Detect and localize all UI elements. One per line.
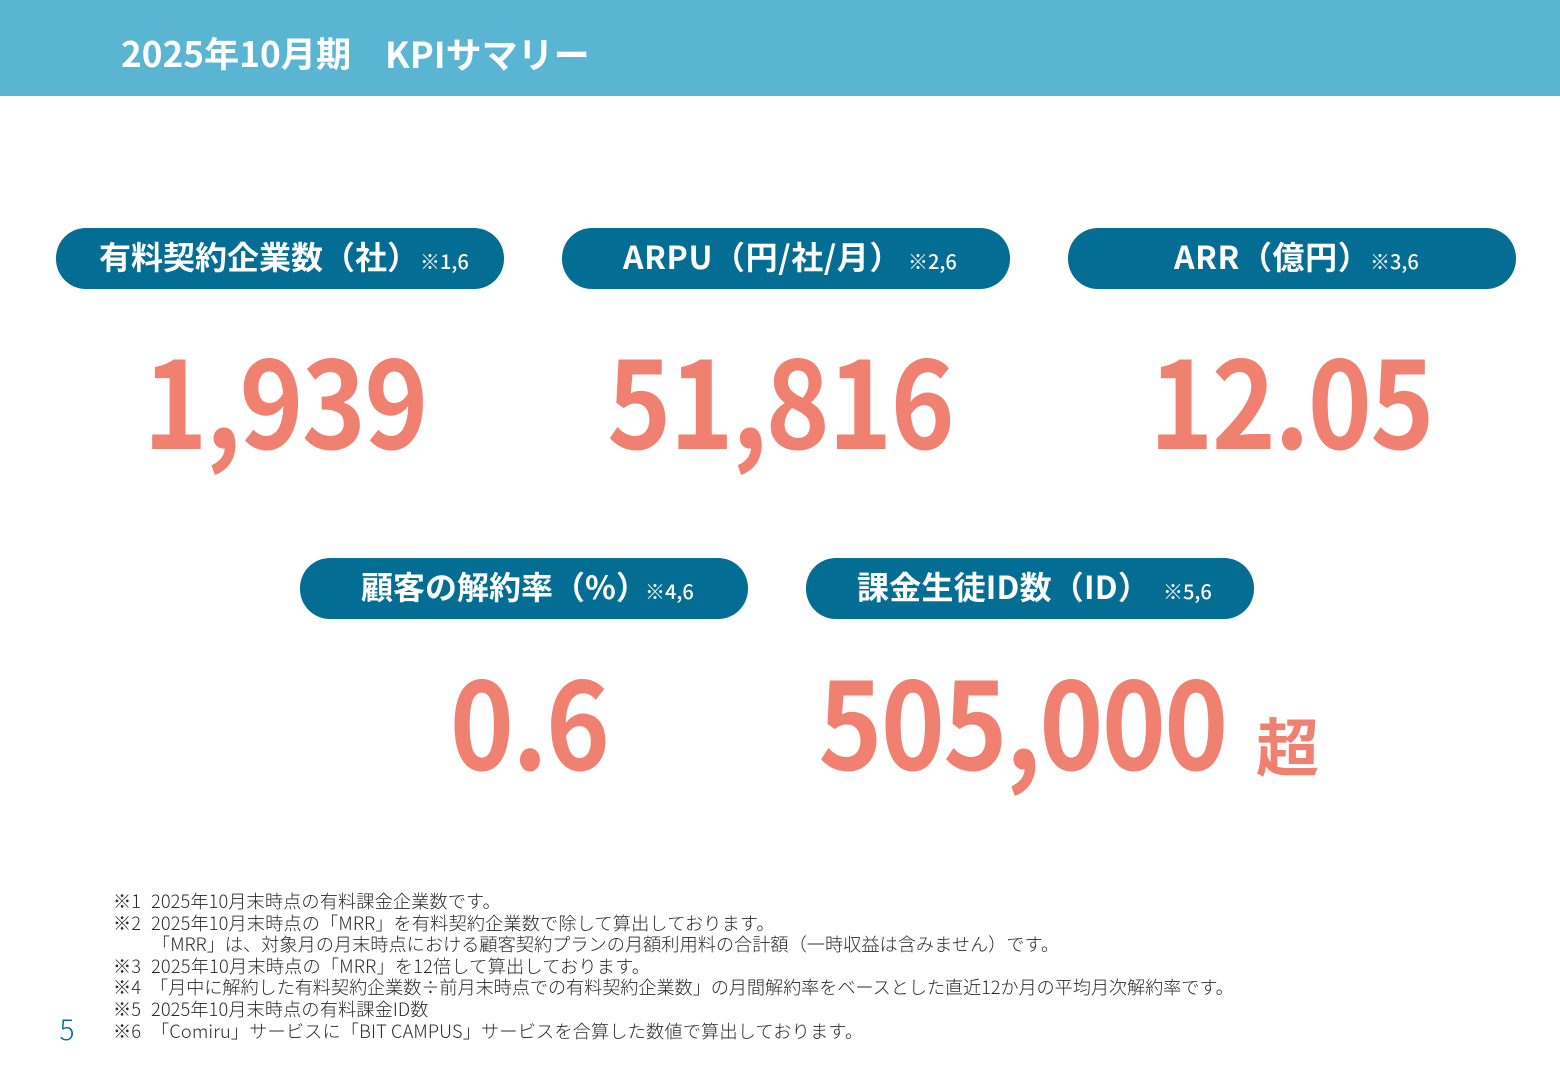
pill label: churn rate: ※4,6 <box>645 576 694 605</box>
pill label: ARR <box>1068 228 1516 289</box>
footnotes: 2025年10月末時点の「MRR」を有料契約企業数で除して算出しております。 <box>151 910 775 936</box>
footnotes: ※3 <box>113 952 141 978</box>
pill label: paying companies: 有料契約企業数（社） <box>99 233 419 279</box>
unit suffix: 超 <box>1256 699 1319 790</box>
footnotes: 「月中に解約した有料契約企業数÷前月末時点での有料契約企業数」の月間解約率をベースとした直近12か月の平均月次解約率です。 <box>150 974 1234 1000</box>
value: ARR: 12.05 <box>1149 309 1433 484</box>
pill label: ARR: ARR（億円） <box>1174 233 1370 279</box>
title <box>121 27 590 79</box>
footnotes: 2025年10月末時点の有料課金ID数 <box>151 996 429 1022</box>
footnotes <box>113 888 1234 1044</box>
header banner <box>0 0 1560 96</box>
pill label: ARPU: ARPU（円/社/月） <box>623 233 902 279</box>
footnotes: ※4 <box>113 974 141 1000</box>
pill label: billed student IDs: 課金生徒ID数（ID） <box>857 563 1150 609</box>
footnotes: 2025年10月末時点の有料課金企業数です。 <box>151 888 501 914</box>
value: churn rate: 0.6 <box>450 630 608 804</box>
pill label: billed student IDs <box>806 558 1254 619</box>
footnotes: 「MRR」は、対象月の月末時点における顧客契約プランの月額利用料の合計額（一時収益は含みません）です。 <box>152 931 1059 957</box>
footnotes: ※1 <box>113 888 141 914</box>
title: KPIサマリー <box>385 27 590 79</box>
pill label: ARR: ※3,6 <box>1370 246 1419 275</box>
title: 2025年10月期 <box>121 27 351 78</box>
pill label: ARPU: ※2,6 <box>908 246 957 275</box>
footnotes: ※6 <box>113 1018 141 1044</box>
pill label: ARPU <box>562 228 1010 289</box>
value: paying companies: 1,939 <box>143 309 427 484</box>
footnotes: ※5 <box>113 996 141 1022</box>
footnotes: 「Comiru」サービスに「BIT CAMPUS」サービスを合算した数値で算出しております。 <box>151 1018 863 1044</box>
value: ARPU: 51,816 <box>607 309 953 484</box>
footnotes: ※2 <box>113 910 141 936</box>
page number: 5 <box>60 1009 74 1049</box>
pill label: billed student IDs: ※5,6 <box>1163 576 1212 605</box>
pill label: paying companies: ※1,6 <box>420 246 469 275</box>
footnotes: 2025年10月末時点の「MRR」を12倍して算出しております。 <box>151 952 650 978</box>
value: billed student IDs: 505,000 <box>818 630 1227 804</box>
pill label: churn rate <box>300 558 748 619</box>
pill label: churn rate: 顧客の解約率（%） <box>361 563 648 609</box>
pill label: paying companies <box>56 228 504 289</box>
